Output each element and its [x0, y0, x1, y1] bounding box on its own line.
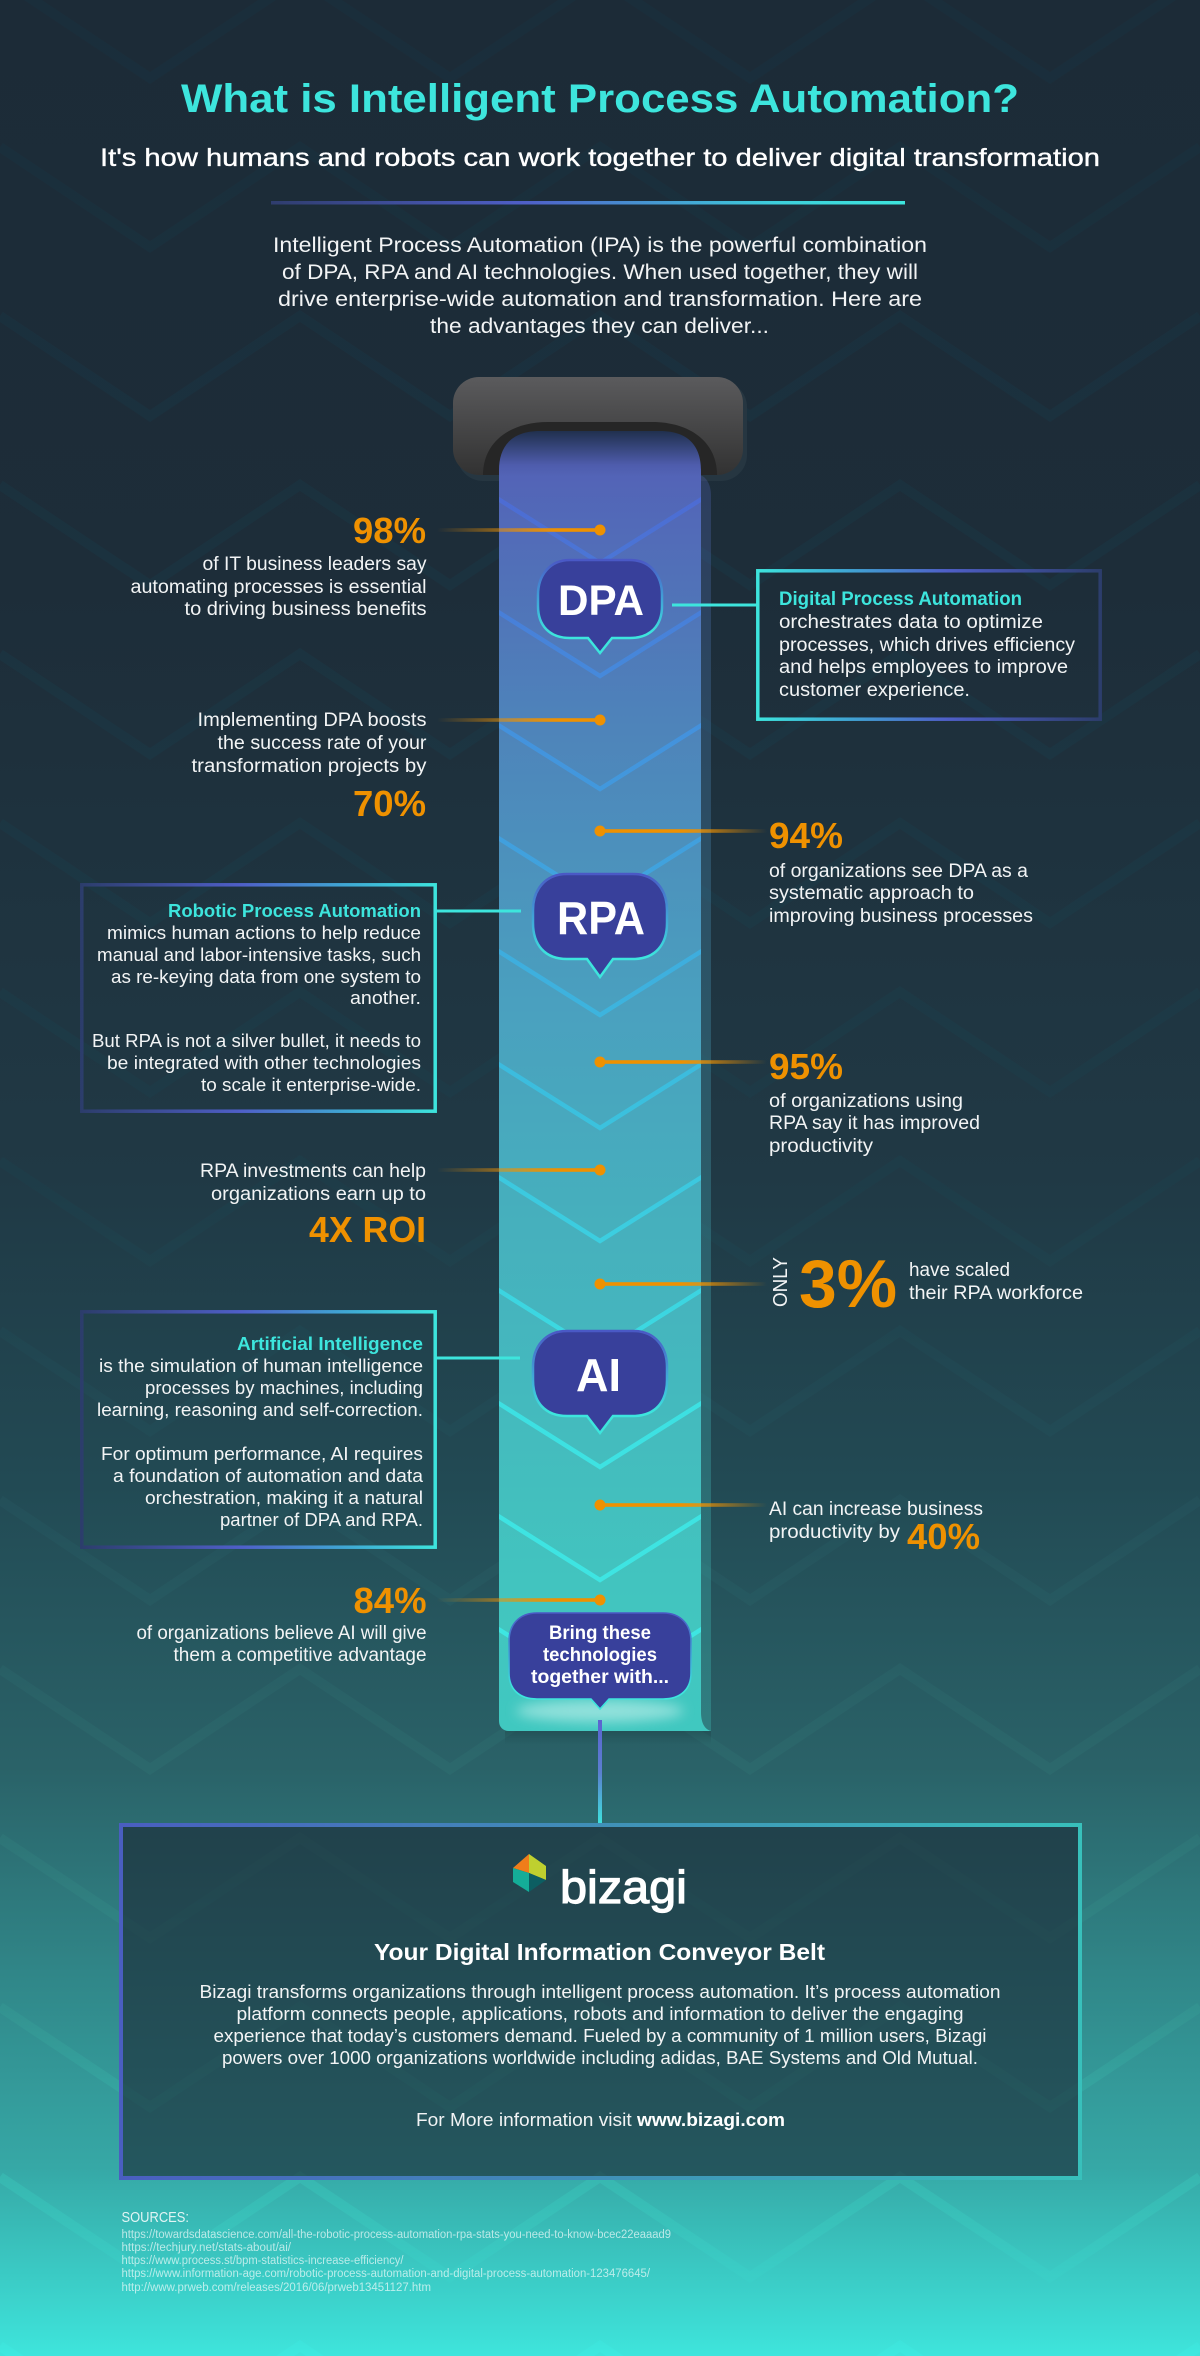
panel: Artificial Intelligence: learning, reasoning and self-correction.	[97, 1400, 423, 1420]
stat: 94%: improving business processes	[769, 906, 1033, 927]
stat: 4X ROI: 4X ROI	[309, 1209, 426, 1250]
stat: 40%: productivity by	[769, 1522, 901, 1543]
conveyor roller head	[453, 377, 743, 475]
stat: 95%: productivity	[769, 1136, 874, 1157]
panel: Robotic Process Automation: manual and labor-intensive tasks, such	[97, 945, 421, 965]
bubble: bring these technologies together: technologies	[543, 1645, 657, 1666]
footer body text: Bizagi transforms organizations through intelligent process automation. It’s process automation	[200, 1982, 1000, 2002]
stat: 95%: RPA say it has improved	[769, 1113, 980, 1134]
stat: 84%	[136, 1580, 606, 1666]
stat: 40%	[594, 1499, 983, 1557]
panel: Robotic Process Automation: be integrated with other technologies	[107, 1053, 421, 1073]
panel: Robotic Process Automation: mimics human actions to help reduce	[107, 923, 421, 943]
footer body text: platform connects people, applications, robots and information to deliver the engaging	[236, 2004, 964, 2024]
stat: 95%: 95%	[769, 1046, 843, 1087]
stat: 70%: the success rate of your	[218, 733, 427, 754]
stat: 98%: automating processes is essential	[130, 577, 426, 598]
stat: 4X ROI: organizations earn up to	[211, 1184, 426, 1205]
sources	[122, 2209, 671, 2294]
stat: 94%: systematic approach to	[769, 883, 974, 904]
panel: Robotic Process Automation: But RPA is not a silver bullet, it needs to	[92, 1031, 421, 1051]
sources: SOURCES:	[122, 2209, 189, 2226]
stat: 84%: them a competitive advantage	[174, 1645, 426, 1666]
stat: 98%	[130, 510, 606, 620]
sources: https://towardsdatascience.com/all-the-robotic-process-automation-rpa-stats-you-need-to-know-bcec22eaaad9	[122, 2229, 671, 2241]
intro text: of DPA, RPA and AI technologies. When used together, they will	[282, 261, 918, 284]
panel: Robotic Process Automation: as re-keying data from one system to	[111, 967, 421, 987]
footer heading: Your Digital Information Conveyor Belt	[374, 1939, 825, 1965]
logo: Bizagi	[513, 1854, 687, 1913]
stat: 40%: 40%	[907, 1516, 980, 1557]
panel: Artificial Intelligence: a foundation of automation and data	[113, 1466, 424, 1486]
bubble: bring these technologies together: Bring these	[549, 1623, 651, 1644]
panel: Artificial Intelligence	[82, 1312, 435, 1547]
panel: Artificial Intelligence: Artificial Intelligence	[237, 1334, 423, 1354]
footer body text: powers over 1000 organizations worldwide including adidas, BAE Systems and Old Mutual.	[222, 2048, 978, 2068]
intro text	[273, 234, 927, 338]
stat: 94%: 94%	[769, 815, 843, 856]
stat: 98%: of IT business leaders say	[202, 554, 427, 575]
stat: only 3%: 3%	[799, 1246, 897, 1322]
bubble: AI	[533, 1331, 667, 1433]
stat: 70%: 70%	[353, 783, 426, 824]
panel: Artificial Intelligence: is the simulation of human intelligence	[99, 1356, 423, 1376]
bubble: DPA	[538, 560, 662, 653]
stat: 40%: AI can increase business	[769, 1499, 983, 1520]
stat: 98%: to driving business benefits	[184, 599, 426, 620]
intro text: the advantages they can deliver...	[430, 315, 769, 338]
stat: only 3%: their RPA workforce	[909, 1283, 1083, 1304]
stat: 70%: transformation projects by	[192, 756, 427, 777]
bubble: RPA	[533, 874, 667, 977]
panel: Robotic Process Automation: to scale it enterprise-wide.	[201, 1075, 421, 1095]
intro text: Intelligent Process Automation (IPA) is the powerful combination	[273, 234, 927, 257]
stat: 94%	[594, 815, 1033, 927]
bubble: bring these technologies together	[509, 1613, 691, 1709]
connector: belt to footer	[598, 1720, 602, 1825]
bubble: DPA: DPA	[558, 577, 644, 625]
panel: Robotic Process Automation: another.	[350, 988, 421, 1008]
footer link: For More information visit www.bizagi.com	[416, 2110, 785, 2130]
stat: 84%: 84%	[354, 1580, 426, 1621]
stat: 4X ROI	[200, 1161, 606, 1250]
stat: only 3%: have scaled	[909, 1260, 1010, 1281]
panel: Digital Process Automation: Digital Process Automation	[779, 589, 1022, 610]
connector: RPA to panel	[436, 910, 521, 912]
intro text: drive enterprise-wide automation and transformation. Here are	[278, 288, 922, 311]
sources: https://www.information-age.com/robotic-process-automation-and-digital-process-automation-123476645/	[122, 2268, 651, 2280]
title: What is Intelligent Process Automation?	[181, 77, 1019, 121]
sources: https://techjury.net/stats-about/ai/	[122, 2242, 292, 2254]
belt surface	[499, 431, 711, 1731]
panel: Digital Process Automation	[758, 571, 1100, 719]
footer body text	[200, 1982, 1000, 2068]
bubble: bring these technologies together: together with...	[531, 1667, 669, 1688]
panel: Digital Process Automation: and helps employees to improve	[779, 657, 1068, 678]
stat: only 3%	[594, 1246, 1083, 1322]
panel: Artificial Intelligence: For optimum performance, AI requires	[101, 1444, 423, 1464]
panel: Artificial Intelligence: partner of DPA and RPA.	[220, 1510, 423, 1530]
stat: 70%: Implementing DPA boosts	[198, 710, 426, 731]
panel: Digital Process Automation: customer experience.	[779, 680, 970, 701]
stat: 4X ROI: RPA investments can help	[200, 1161, 426, 1182]
connector: DPA to panel	[672, 604, 757, 606]
panel: Artificial Intelligence: orchestration, making it a natural	[145, 1488, 423, 1508]
bubble: AI: AI	[576, 1349, 621, 1401]
stat: 94%: of organizations see DPA as a	[769, 861, 1028, 882]
bubble: RPA: RPA	[557, 892, 645, 944]
logo: Bizagi: bizagi	[560, 1861, 687, 1913]
stat: only 3%: ONLY	[770, 1257, 792, 1307]
subtitle: It's how humans and robots can work together to deliver digital transformation	[100, 144, 1100, 172]
panel: Digital Process Automation: orchestrates data to optimize	[779, 612, 1043, 633]
stat: 95%	[594, 1046, 980, 1157]
panel: Bizagi footer	[121, 1825, 1080, 2178]
conveyor belt	[453, 377, 747, 1745]
stat: 70%	[192, 710, 606, 824]
stat: 95%: of organizations using	[769, 1091, 963, 1112]
sources: https://www.process.st/bpm-statistics-increase-efficiency/	[122, 2255, 404, 2267]
stat: 98%: 98%	[353, 510, 426, 551]
panel: Artificial Intelligence: processes by machines, including	[145, 1378, 423, 1398]
footer body text: experience that today’s customers demand. Fueled by a community of 1 million users, Bizagi	[214, 2026, 986, 2046]
sources: http://www.prweb.com/releases/2016/06/prweb13451127.htm	[122, 2282, 431, 2294]
panel: Digital Process Automation: processes, which drives efficiency	[779, 635, 1076, 656]
stat: 84%: of organizations believe AI will give	[136, 1623, 426, 1644]
connector: AI to panel	[436, 1356, 520, 1360]
panel: Robotic Process Automation	[82, 885, 435, 1111]
panel: Robotic Process Automation: Robotic Process Automation	[168, 901, 421, 921]
